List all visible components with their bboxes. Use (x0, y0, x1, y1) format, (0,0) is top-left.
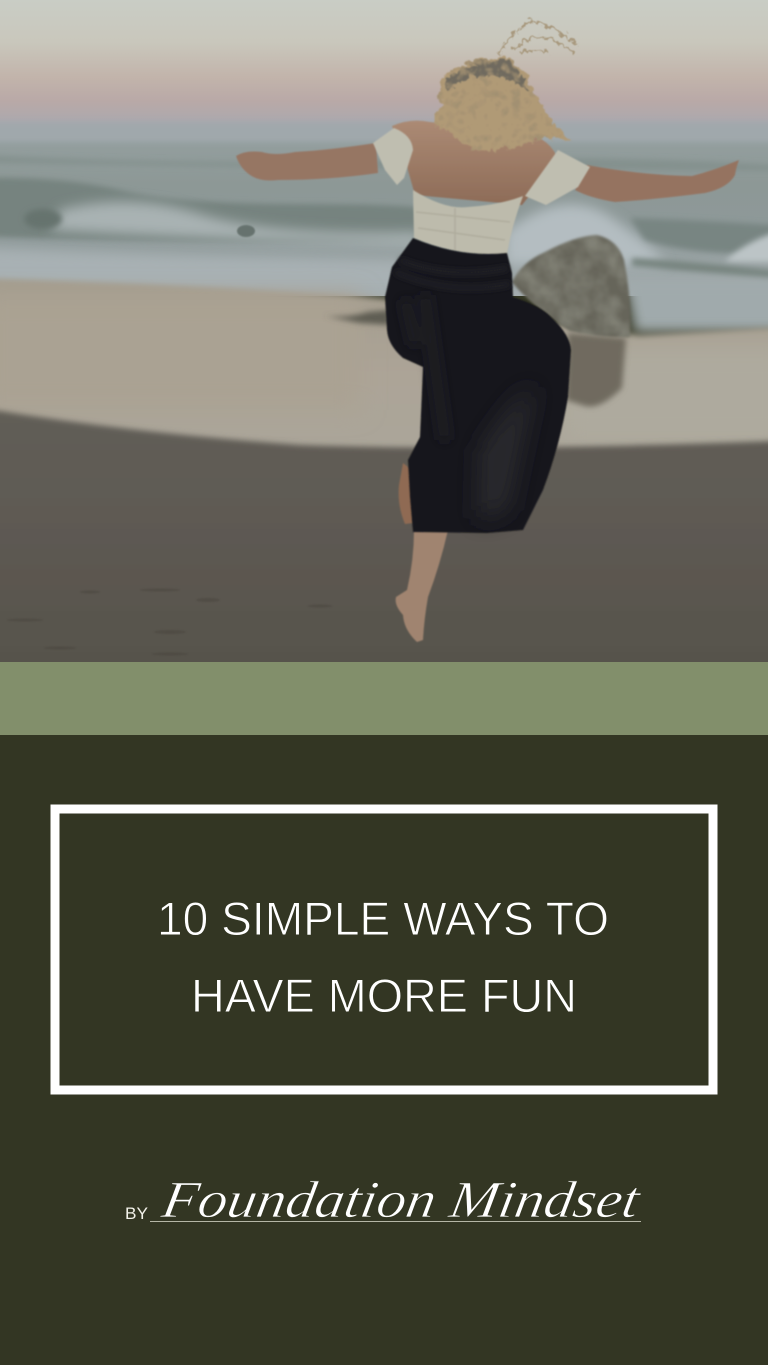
back (392, 121, 558, 205)
left arm (236, 143, 378, 180)
byline (125, 1171, 646, 1229)
photo: woman dancing on beach (0, 0, 768, 680)
woman figure (236, 18, 739, 642)
black skirt (385, 238, 571, 533)
green band (0, 662, 768, 735)
curly hair (431, 18, 574, 148)
left sleeve (373, 128, 413, 185)
dark sand (0, 406, 768, 680)
dark panel (0, 735, 768, 1365)
title: HAVE MORE FUN (191, 969, 577, 1022)
standing leg and foot (396, 530, 448, 642)
title: 10 SIMPLE WAYS TO (157, 892, 609, 945)
sky (0, 0, 768, 140)
signature underline (150, 1221, 641, 1222)
sea (0, 122, 768, 332)
right arm (575, 160, 739, 202)
title frame (55, 809, 713, 1090)
right sleeve (525, 150, 590, 205)
wet sand (0, 278, 768, 470)
corset top (413, 190, 523, 255)
icon: small rocks in surf (24, 209, 255, 237)
back foot (399, 463, 413, 524)
by label: BY (125, 1204, 148, 1223)
signature: Foundation Mindset (157, 1171, 646, 1229)
title (157, 892, 609, 1022)
rock and reflection (325, 235, 630, 407)
